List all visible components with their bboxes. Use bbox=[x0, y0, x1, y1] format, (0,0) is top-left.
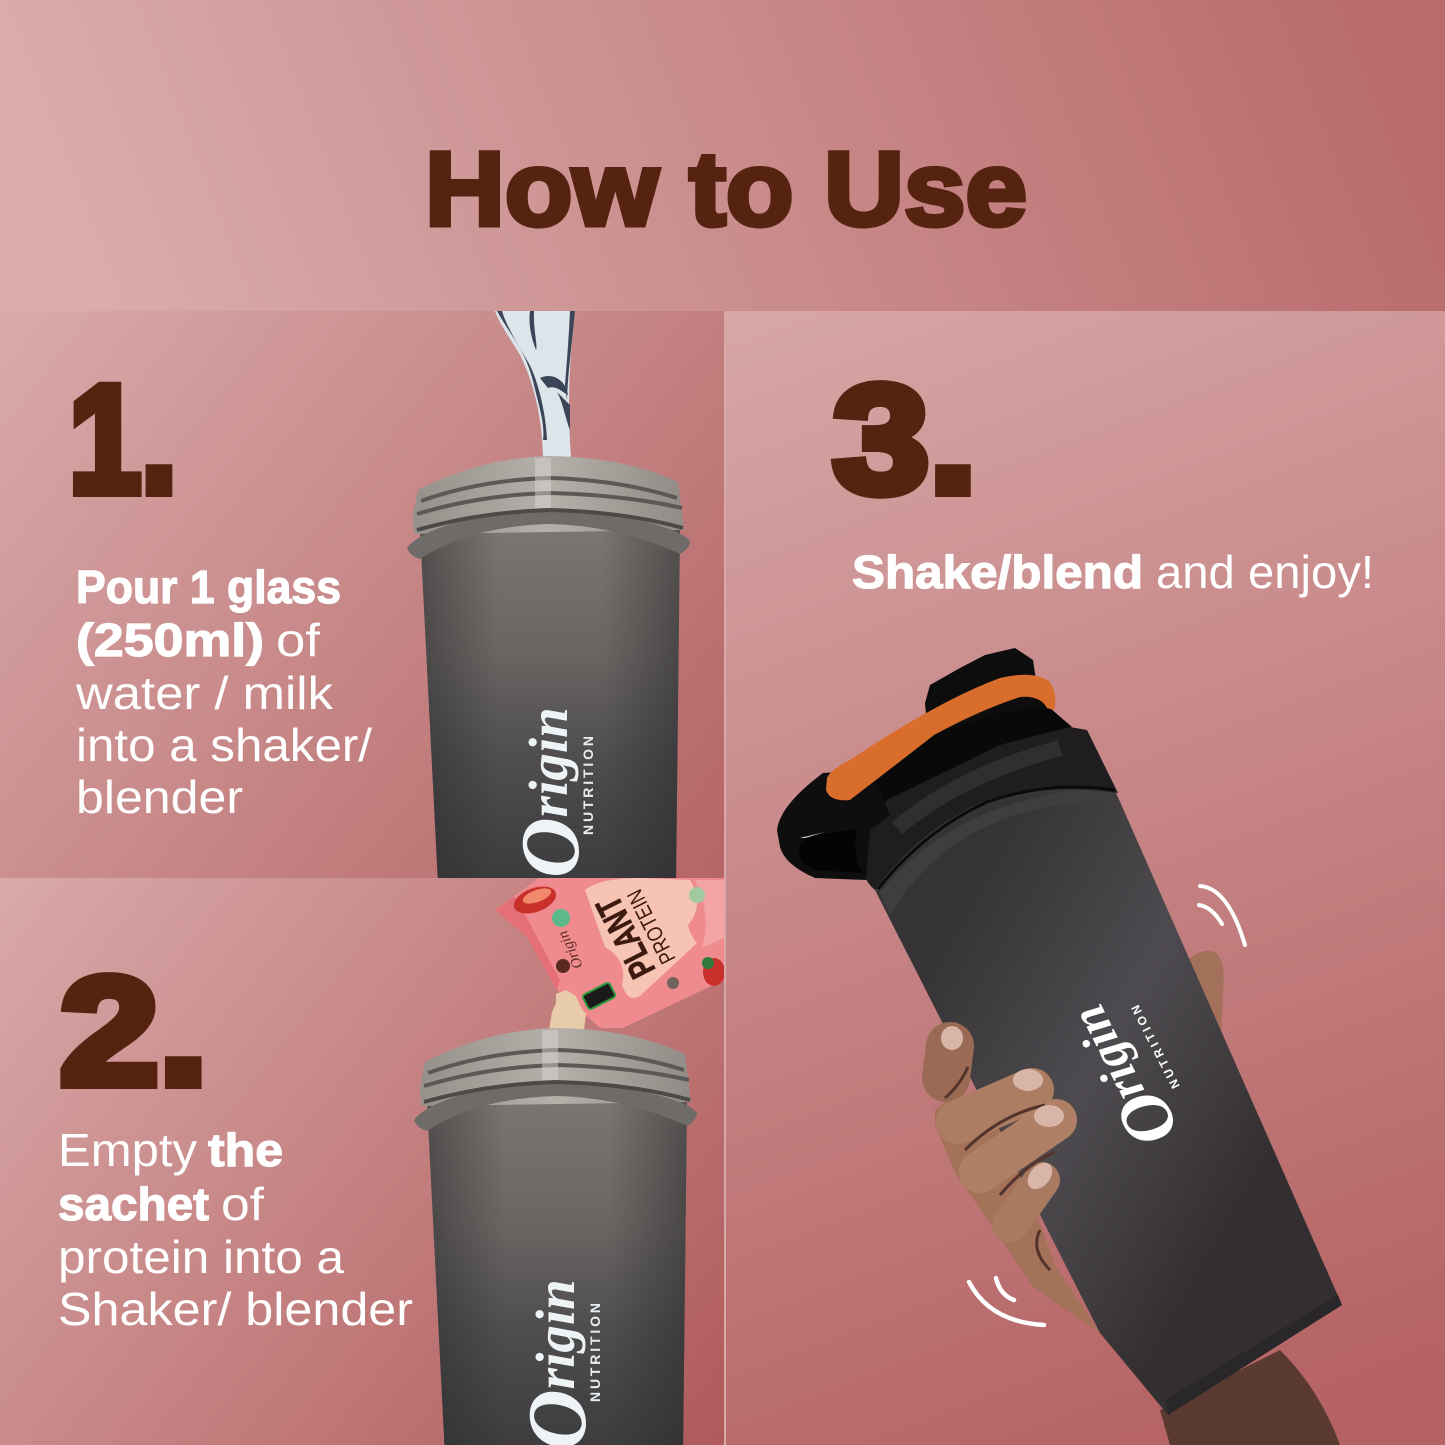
label: Origin logo: rigin bbox=[518, 707, 579, 817]
icon: motion lines upper bbox=[1199, 886, 1245, 945]
icon: bottle collar bbox=[858, 727, 1118, 890]
icon: orange strap bbox=[826, 675, 1055, 800]
icon: shaker cup bbox=[407, 456, 690, 884]
step 2 text: of bbox=[221, 1178, 264, 1230]
step 1 text: water / milk bbox=[75, 667, 334, 719]
icon: water stream bbox=[495, 311, 575, 457]
icon: thumb bbox=[1190, 951, 1224, 1032]
icon: arm bbox=[1160, 1350, 1340, 1445]
label: Origin logo on bottle: O bbox=[1099, 1077, 1194, 1160]
label: Origin on sachet: Origin bbox=[555, 928, 587, 971]
step 1 text: blender bbox=[76, 771, 243, 823]
panel: step 1 bbox=[0, 311, 724, 884]
step number 2: 2. bbox=[60, 946, 208, 1117]
icon: hand fingers bbox=[935, 1026, 1100, 1333]
step number 1: 1. bbox=[69, 354, 177, 525]
icon: protein powder bbox=[549, 990, 586, 1030]
step 1 text: Pour 1 glass bbox=[76, 561, 341, 613]
label: Origin logo: rigin bbox=[525, 1279, 586, 1389]
step 2 text: Shaker/ blender bbox=[58, 1283, 413, 1335]
label: Origin logo: O bbox=[504, 817, 597, 878]
step 2 text: the bbox=[208, 1124, 283, 1176]
label: NUTRITION: NUTRITION bbox=[587, 1300, 603, 1402]
label: NUTRITION: NUTRITION bbox=[580, 733, 596, 835]
label: NUTRITION on bottle: NUTRITION bbox=[1128, 1001, 1183, 1091]
step 2 text: protein into a bbox=[58, 1231, 344, 1283]
panel: step 2 bbox=[0, 872, 730, 1445]
step 2 text bbox=[58, 1124, 413, 1335]
step 1 text: of bbox=[276, 614, 320, 666]
icon: shaker bottle held in hand bbox=[777, 648, 1342, 1415]
step 2 text: sachet bbox=[58, 1178, 209, 1230]
icon: handle bbox=[777, 770, 890, 880]
step 1 text: into a shaker/ bbox=[76, 719, 372, 771]
icon: motion lines lower bbox=[969, 1278, 1044, 1325]
panel: title banner bbox=[0, 0, 1445, 311]
step 3 text: Shake/blend bbox=[852, 546, 1143, 598]
step number 3: 3. bbox=[833, 354, 977, 525]
title: How to Use bbox=[425, 131, 1027, 248]
icon: shaker cup bbox=[414, 1028, 697, 1445]
step 1 text bbox=[75, 561, 372, 823]
finger nails bbox=[941, 1026, 963, 1050]
step 3 text bbox=[852, 554, 1370, 598]
icon: cap knob bbox=[925, 648, 1048, 740]
label: PLANT: PLANT bbox=[588, 890, 663, 985]
step 1 text: (250ml) bbox=[76, 614, 264, 666]
icon: bottle shoulder bbox=[870, 708, 1072, 832]
step 3 text: and enjoy! bbox=[1156, 546, 1374, 598]
label: Origin logo on bottle: rigin bbox=[1059, 996, 1155, 1111]
label: PROTEIN: PROTEIN bbox=[622, 885, 680, 968]
step 2 text: Empty bbox=[58, 1124, 197, 1176]
icon: protein sachet bbox=[495, 872, 730, 1028]
panel: step 3 bbox=[726, 311, 1445, 1445]
